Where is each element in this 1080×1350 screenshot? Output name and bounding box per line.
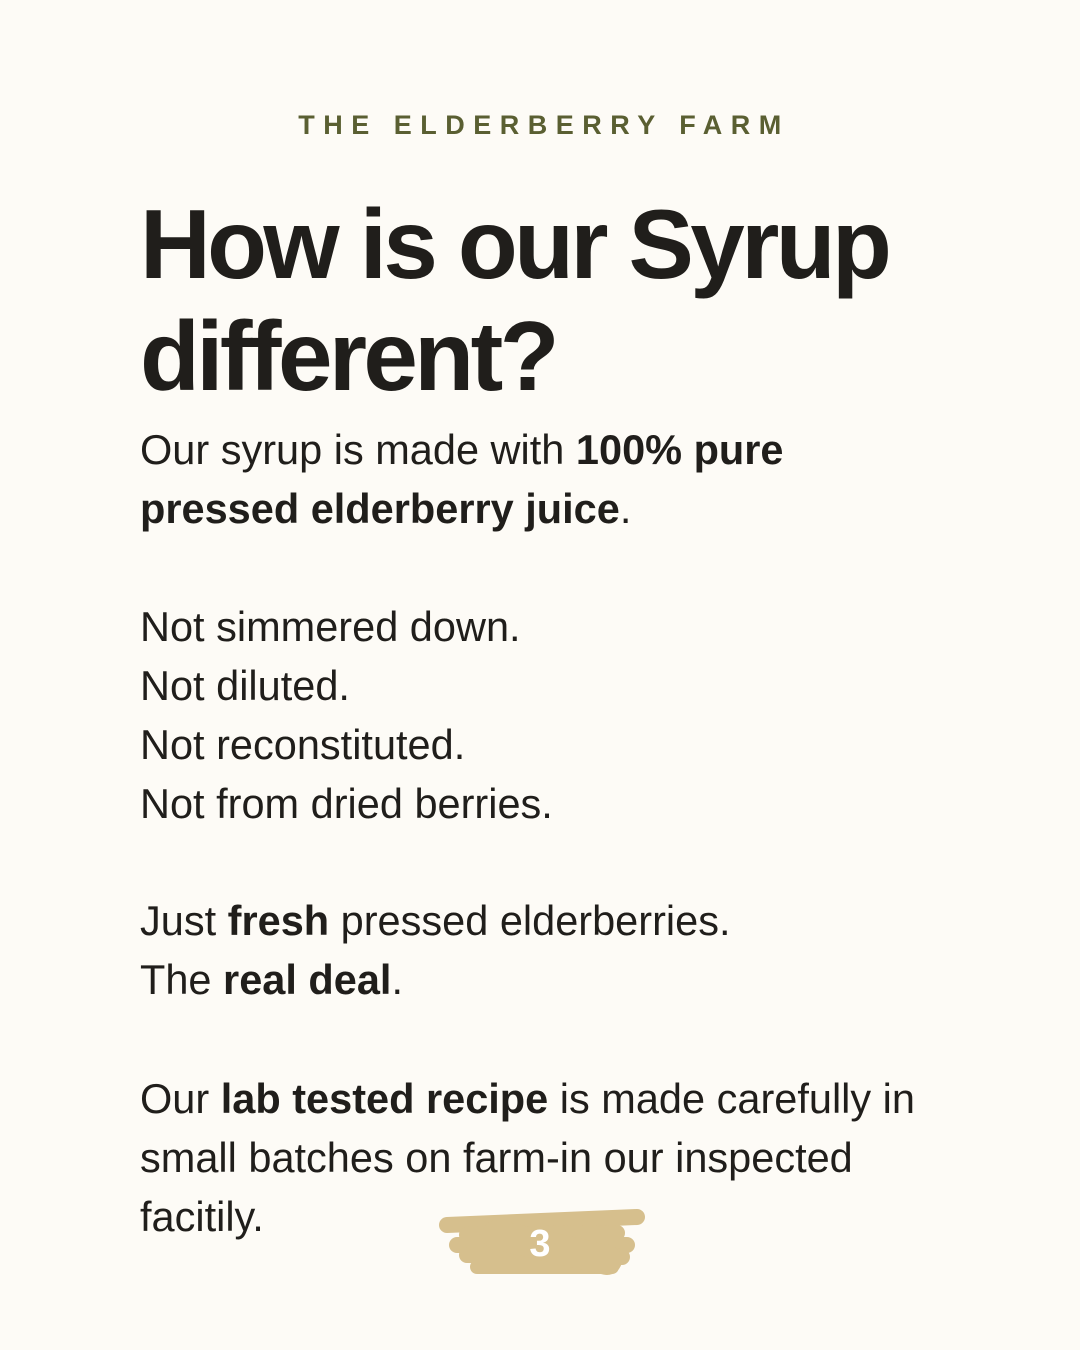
text block: lab tested bbox=[140, 1075, 915, 1240]
text block: not list: Not diluted. bbox=[140, 662, 350, 709]
page number badge: 3 bbox=[529, 1223, 551, 1265]
title: How is our Syrup bbox=[140, 189, 888, 299]
text block: intro: Our syrup is made with 100% pure bbox=[140, 426, 784, 473]
text block: not list: Not from dried berries. bbox=[140, 780, 553, 827]
text block: fresh: Just fresh pressed elderberries. bbox=[140, 897, 730, 944]
text block: fresh: The real deal. bbox=[140, 956, 403, 1003]
text block: fresh bbox=[140, 897, 730, 1003]
text block: lab tested: facitily. bbox=[140, 1193, 264, 1240]
title bbox=[140, 189, 888, 411]
text block: intro bbox=[140, 426, 784, 532]
header: brand name: THE ELDERBERRY FARM bbox=[298, 110, 790, 140]
title: different? bbox=[140, 301, 556, 411]
text block: not list bbox=[140, 603, 553, 827]
text block: intro: pressed elderberry juice. bbox=[140, 485, 631, 532]
page number badge bbox=[439, 1209, 645, 1275]
text block: not list: Not simmered down. bbox=[140, 603, 521, 650]
text block: lab tested: small batches on farm-in our inspected bbox=[140, 1134, 853, 1181]
text block: lab tested: Our lab tested recipe is made carefully in bbox=[140, 1075, 915, 1122]
text block: not list: Not reconstituted. bbox=[140, 721, 465, 768]
